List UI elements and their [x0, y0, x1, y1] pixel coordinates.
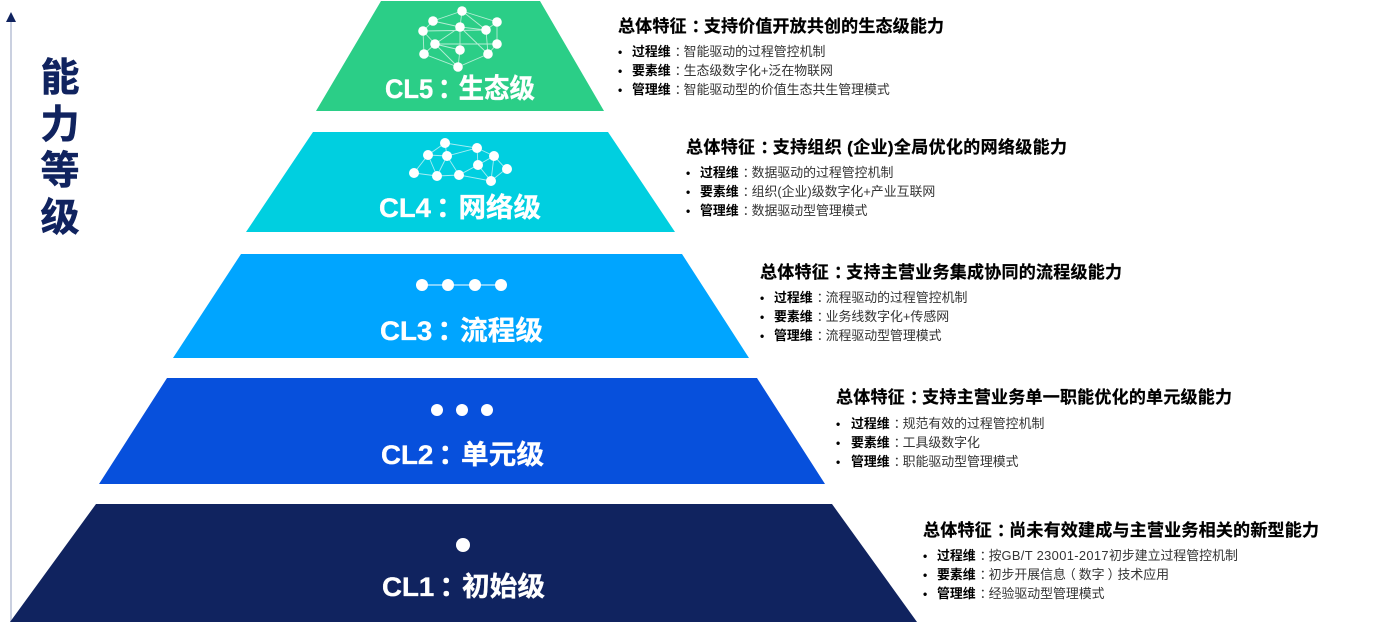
- text block: CL4 description: [686, 137, 1067, 218]
- text block: CL1 description: •: [923, 549, 927, 563]
- axis title: 力: [40, 104, 80, 147]
- text block: CL4 description: •: [686, 204, 690, 218]
- text block: CL4 description: 总体特征 ：支持组织 (企业)全局优化的网络级能力: [686, 137, 1067, 157]
- text block: CL3 description: 总体特征 ：支持主营业务集成协同的流程级能力: [760, 262, 1122, 282]
- text block: CL1 description: 管理维 ：经验驱动型管理模式: [937, 586, 1105, 601]
- text block: CL4 description: 管理维 ：数据驱动型管理模式: [700, 203, 868, 218]
- text block: CL4 description: 过程维 ：数据驱动的过程管控机制: [700, 165, 893, 180]
- text block: CL5 description: •: [618, 45, 622, 59]
- axis title: 能: [40, 57, 80, 100]
- text block: CL5 description: 总体特征 ：支持价值开放共创的生态级能力: [618, 16, 944, 36]
- label: CL3: CL3：流程级: [380, 316, 543, 346]
- text block: CL3 description: 要素维 ：业务线数字化+传感网: [774, 309, 949, 324]
- axis title: 等: [40, 150, 80, 193]
- icon: chain of dots: [416, 279, 507, 291]
- label: CL4: CL4：网络级: [379, 193, 541, 223]
- text block: CL5 description: [618, 16, 944, 97]
- label: CL1: CL1：初始级: [382, 572, 545, 602]
- text block: CL2 description: •: [836, 455, 840, 469]
- panel: CL4 trapezoid: [246, 132, 675, 232]
- text block: CL5 description: 管理维 ：智能驱动型的价值生态共生管理模式: [632, 82, 890, 97]
- text block: CL3 description: [760, 262, 1122, 343]
- text block: CL5 description: 要素维 ：生态级数字化+泛在物联网: [632, 63, 833, 78]
- text block: CL5 description: •: [618, 83, 622, 97]
- text block: CL2 description: 管理维 ：职能驱动型管理模式: [851, 454, 1019, 469]
- icon: three dots: [431, 404, 493, 416]
- text block: CL4 description: •: [686, 166, 690, 180]
- text block: CL2 description: 过程维 ：规范有效的过程管控机制: [851, 416, 1044, 431]
- text block: CL4 description: •: [686, 185, 690, 199]
- panel: CL1 trapezoid: [10, 504, 917, 622]
- panel: CL2 trapezoid: [99, 378, 825, 484]
- text block: CL2 description: 要素维 ：工具级数字化: [851, 435, 980, 450]
- axis title: 级: [40, 197, 80, 240]
- text block: CL5 description: 过程维 ：智能驱动的过程管控机制: [632, 44, 825, 59]
- text block: CL2 description: [836, 387, 1232, 469]
- text block: CL5 description: •: [618, 64, 622, 78]
- icon: ecosystem mesh: [418, 6, 502, 72]
- text block: CL1 description: •: [923, 587, 927, 601]
- vertical axis arrow: [6, 12, 16, 622]
- text block: CL1 description: [923, 520, 1319, 601]
- text block: CL3 description: •: [760, 291, 764, 305]
- panel: CL5 trapezoid: [316, 1, 604, 111]
- text block: CL3 description: •: [760, 329, 764, 343]
- panel: CL3 trapezoid: [173, 254, 749, 358]
- icon: single dot: [456, 538, 470, 552]
- text block: CL1 description: •: [923, 568, 927, 582]
- text block: CL3 description: 过程维 ：流程驱动的过程管控机制: [774, 290, 967, 305]
- icon: network: [409, 138, 512, 186]
- text block: CL2 description: 总体特征 ：支持主营业务单一职能优化的单元级能力: [836, 387, 1232, 407]
- text block: CL3 description: •: [760, 310, 764, 324]
- label: CL2: CL2：单元级: [381, 440, 544, 470]
- text block: CL2 description: •: [836, 417, 840, 431]
- text block: CL3 description: 管理维 ：流程驱动型管理模式: [774, 328, 942, 343]
- text block: CL1 description: 过程维 ：按GB/T 23001-2017初步建立过程管控机制: [937, 548, 1238, 563]
- text block: CL1 description: 总体特征 ：尚未有效建成与主营业务相关的新型能力: [923, 520, 1319, 540]
- text block: CL4 description: 要素维 ：组织(企业)级数字化+产业互联网: [700, 184, 935, 199]
- text block: CL2 description: •: [836, 436, 840, 450]
- label: CL5: CL5：生态级: [385, 74, 535, 104]
- text block: CL1 description: 要素维 ：初步开展信息（数字）技术应用: [937, 567, 1169, 582]
